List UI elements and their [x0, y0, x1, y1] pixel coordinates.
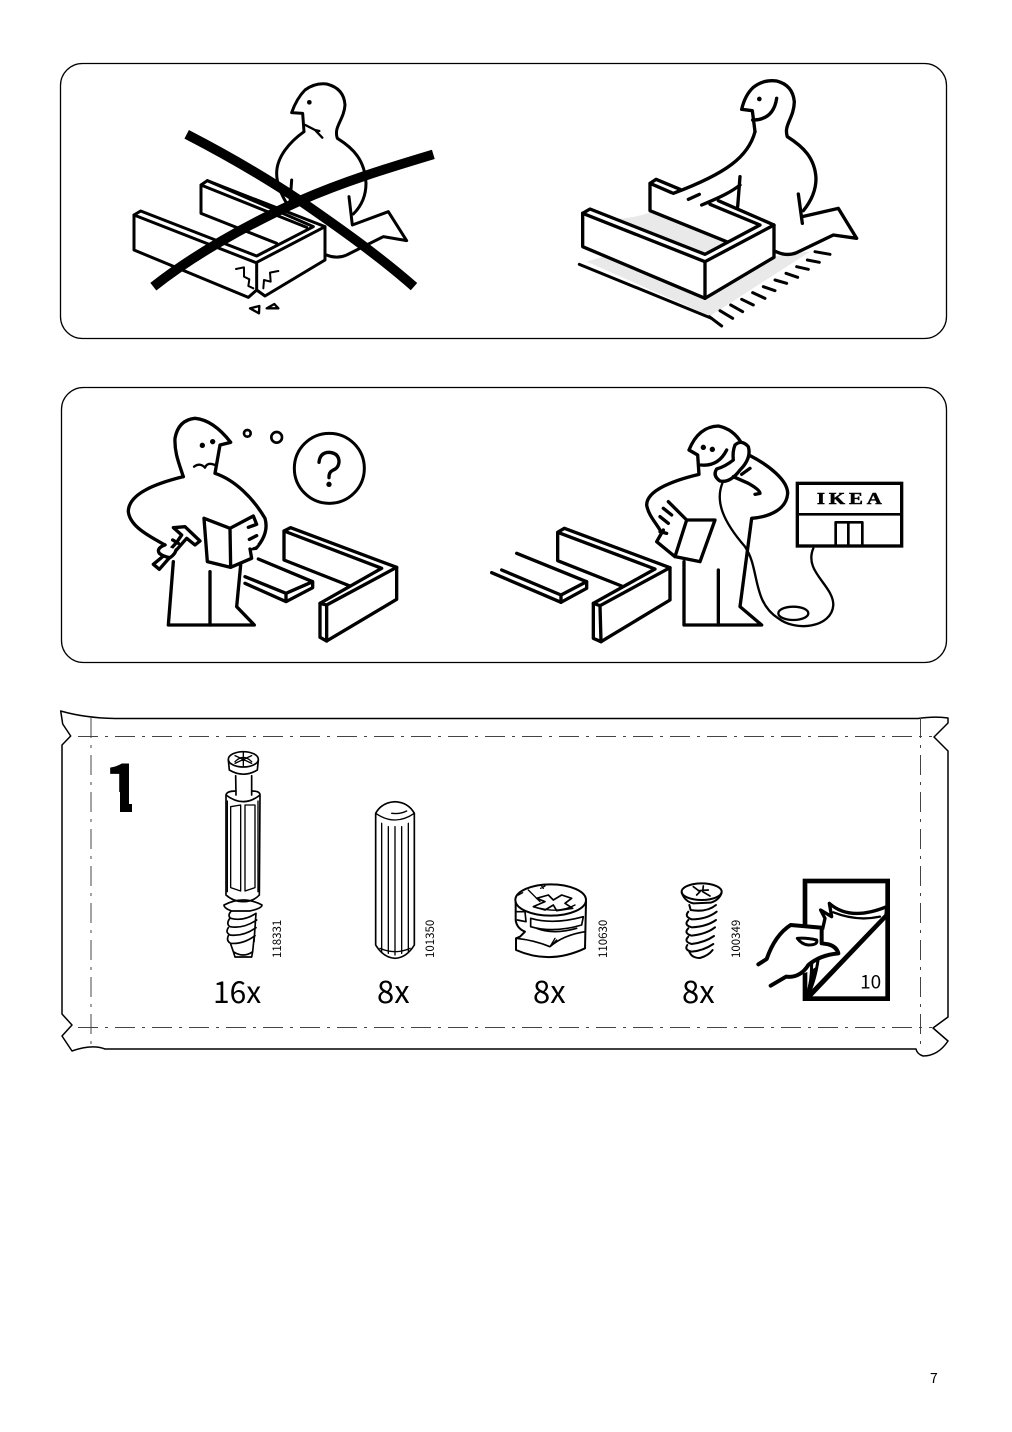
quantity: 8x: 8x: [682, 967, 715, 1012]
part number: 101350: 101350: [422, 920, 438, 958]
bag seal dashed lines: [78, 718, 932, 1049]
illustration: happy person assembling on rug: [579, 80, 857, 326]
step number: 1: [103, 735, 143, 832]
part: cam lock nut 110630: [515, 884, 586, 957]
icon: IKEA store: [797, 483, 902, 546]
icon: hammer in hand: [153, 527, 200, 569]
part number: 118331: 118331: [269, 920, 285, 958]
frame on rug: [583, 179, 774, 298]
curled page corner: [807, 903, 887, 999]
icon: thought bubbles with question mark: [244, 430, 364, 503]
illustration: happy person phoning IKEA: [492, 426, 902, 642]
icon: broken chips: [250, 304, 278, 313]
figure: confused person: [128, 418, 266, 625]
page number on manual: 10: [860, 967, 881, 994]
page frame: [805, 881, 888, 999]
quantity: 8x: 8x: [377, 967, 410, 1012]
icon: hand turning manual page: [758, 881, 888, 999]
L-shaped frame: [284, 528, 397, 641]
part number: 110630: 110630: [595, 920, 611, 958]
figure: arms reaching over frame: [673, 132, 755, 207]
telephone cord: [720, 483, 833, 626]
figure: person on telephone: [647, 426, 788, 625]
part: wooden dowel 101350: [376, 802, 414, 958]
part number: 100349: 100349: [728, 920, 744, 958]
icon: telephone handset: [715, 442, 760, 494]
loose board: [245, 559, 313, 602]
frame: cracked wooden frame: [134, 181, 325, 297]
page number: 7: [930, 1368, 938, 1388]
part: cam bolt 118331: [224, 752, 262, 957]
icon: cross-out mark: [153, 134, 433, 287]
quantity: 8x: 8x: [533, 967, 566, 1012]
icon: IKEA store: IKEA: [817, 490, 882, 508]
illustration: confused person with hammer: [128, 418, 397, 641]
panel: hardware bag for step 1: [61, 711, 948, 1056]
icon: open manual held by person: [204, 516, 257, 567]
figure: sitting worried person: [277, 84, 407, 257]
hand: [758, 925, 839, 997]
rug with fringe: [579, 237, 830, 326]
icon: manual in hand: [657, 502, 715, 562]
illustration: worried person and cracked frame, crossed out: [134, 84, 433, 313]
loose board: [492, 553, 587, 602]
quantity: 16x: 16x: [213, 968, 261, 1012]
panel: ask for help: [62, 388, 946, 662]
part: screw 100349: [682, 883, 722, 958]
bag outline: [61, 711, 948, 1056]
figure: sitting happy person: [713, 80, 857, 257]
L-shaped frame: [558, 528, 670, 642]
panel: do not assemble on hard floor: [60, 64, 946, 338]
